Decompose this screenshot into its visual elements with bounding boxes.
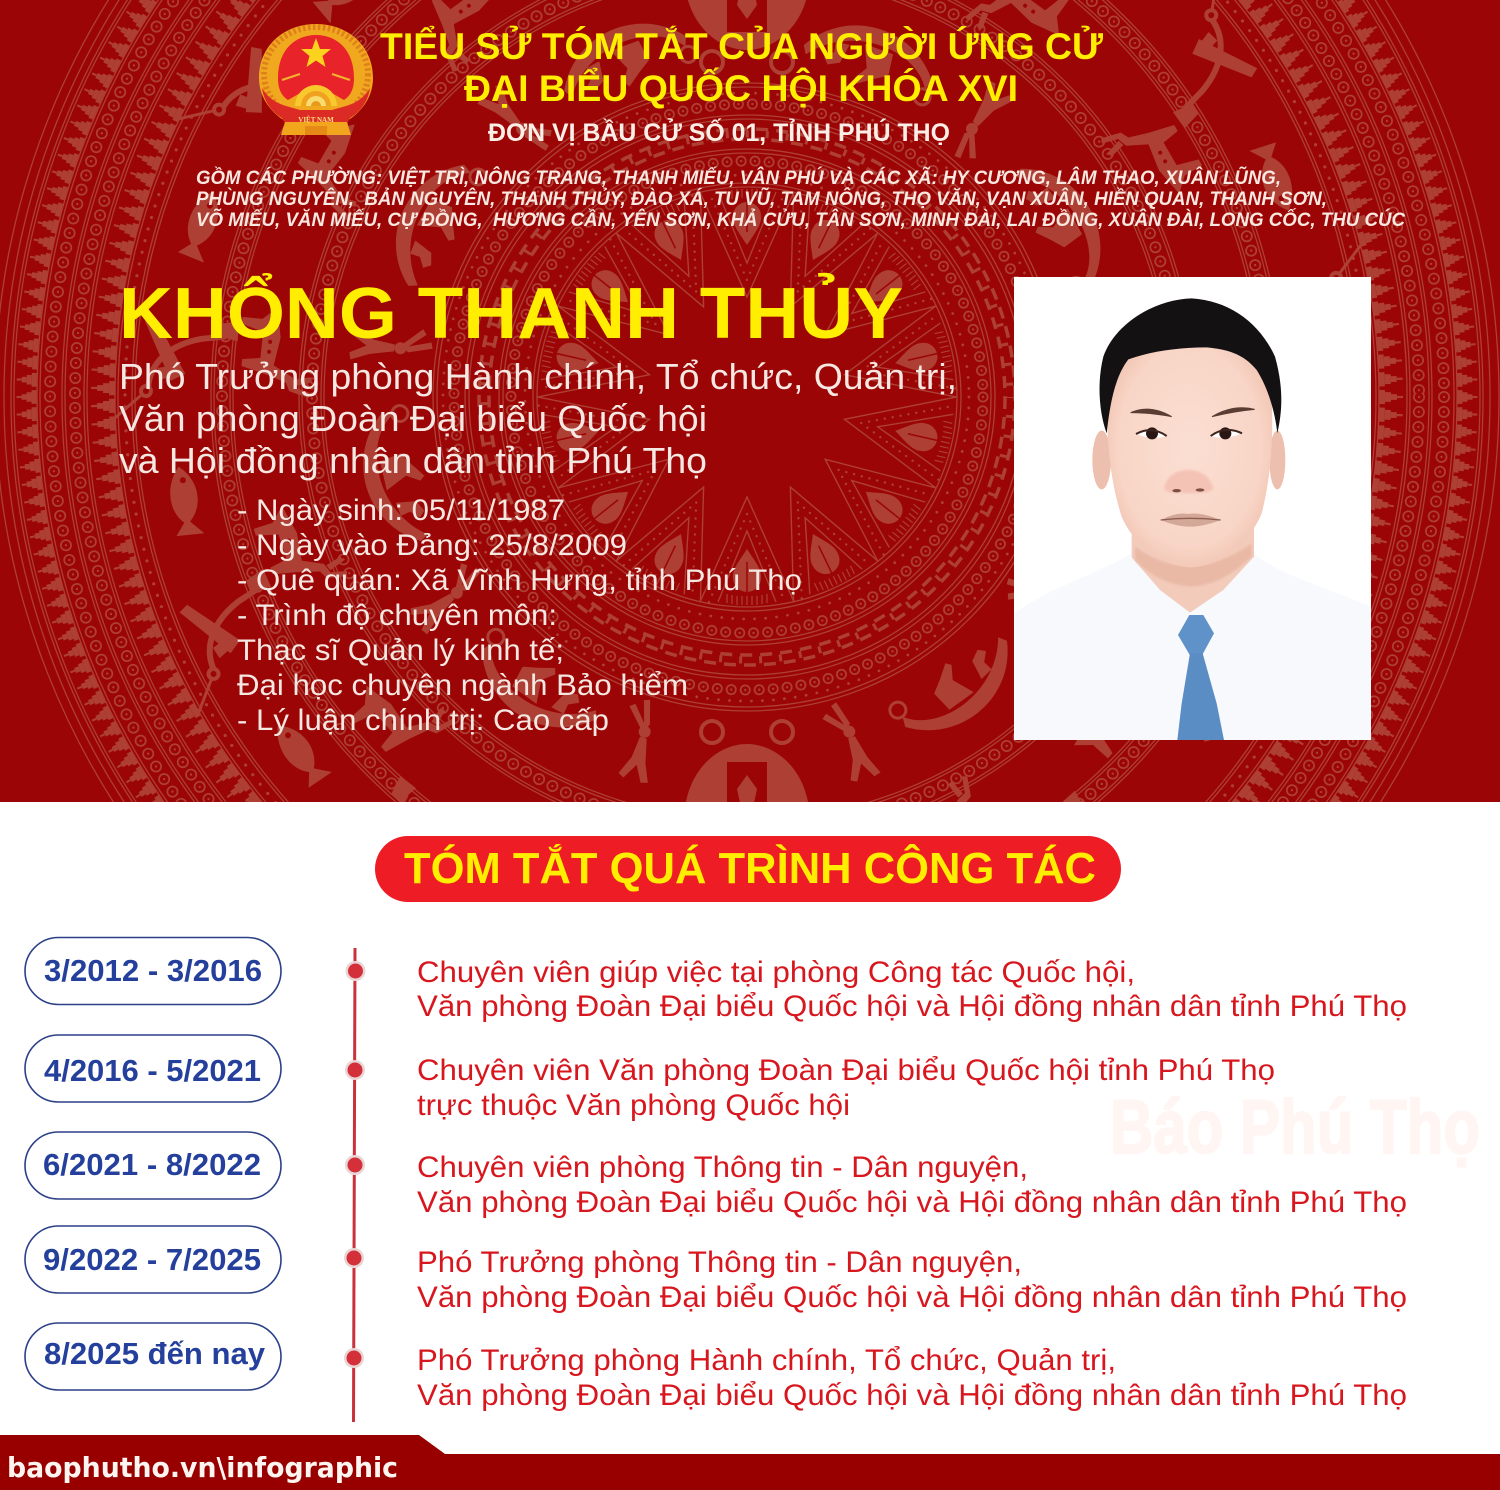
date pill: 9/2022 - 7/2025 <box>25 1226 281 1293</box>
date pill: 6/2021 - 8/2022 <box>25 1132 281 1199</box>
text block: personal details: - Trình độ chuyên môn: <box>237 599 557 632</box>
text block: personal details: - Ngày vào Đảng: 25/8/2009 <box>237 529 627 562</box>
date pill: 4/2016 - 5/2021: 4/2016 - 5/2021 <box>44 1053 261 1088</box>
heading pill: career summary: TÓM TẮT QUÁ TRÌNH CÔNG TÁC <box>404 842 1096 893</box>
heading pill: career summary <box>375 836 1121 902</box>
text block: wards and communes: VÕ MIẾU, VĂN MIẾU, CỰ ĐỒNG, HƯƠNG CẦN, YÊN SƠN, KHẢ CỬU, TÂN SƠN, MINH ĐÀI, LAI ĐỒNG, XUÂN ĐÀI, LONG CỐC, THU CÚC <box>196 207 1406 231</box>
portrait photo <box>1014 277 1371 740</box>
footer bar <box>0 1435 1500 1490</box>
career entry 4: Văn phòng Đoàn Đại biểu Quốc hội và Hội đồng nhân dân tỉnh Phú Thọ <box>417 1281 1407 1314</box>
title: ĐẠI BIỂU QUỐC HỘI KHÓA XVI <box>464 67 1018 109</box>
career entry 2: Chuyên viên Văn phòng Đoàn Đại biểu Quốc hội tỉnh Phú Thọ <box>417 1054 1275 1087</box>
date pill: 3/2012 - 3/2016 <box>25 938 281 1004</box>
career entry 2 <box>417 1054 1275 1122</box>
date pill: 6/2021 - 8/2022: 6/2021 - 8/2022 <box>43 1147 261 1182</box>
panel: career summary background <box>0 802 1500 1490</box>
text block: personal details <box>237 494 802 737</box>
timeline axis with markers <box>344 948 366 1422</box>
career entry 5: Phó Trưởng phòng Hành chính, Tổ chức, Quản trị, <box>417 1344 1116 1377</box>
text block: current position: và Hội đồng nhân dân tỉnh Phú Thọ <box>119 440 707 481</box>
date pill: 3/2012 - 3/2016: 3/2012 - 3/2016 <box>44 953 262 988</box>
career entry 3: Chuyên viên phòng Thông tin - Dân nguyện, <box>417 1151 1028 1184</box>
text block: current position <box>119 356 957 481</box>
footer bar: baophutho.vn\infographic <box>7 1451 398 1484</box>
icon: Vietnam national emblem <box>259 24 373 135</box>
career entry 1 <box>417 956 1407 1023</box>
text block: personal details: Thạc sĩ Quản lý kinh tế; <box>237 634 564 667</box>
career entry 5: Văn phòng Đoàn Đại biểu Quốc hội và Hội đồng nhân dân tỉnh Phú Thọ <box>417 1379 1407 1412</box>
text block: current position: Văn phòng Đoàn Đại biểu Quốc hội <box>119 398 707 439</box>
career entry 4: Phó Trưởng phòng Thông tin - Dân nguyện, <box>417 1246 1022 1279</box>
career entry 2: trực thuộc Văn phòng Quốc hội <box>417 1089 850 1122</box>
date pill: 4/2016 - 5/2021 <box>25 1035 281 1102</box>
text block: personal details: - Ngày sinh: 05/11/1987 <box>237 494 565 527</box>
career entry 5 <box>417 1344 1407 1412</box>
candidate name: KHỔNG THANH THỦY <box>119 273 903 354</box>
subtitle: electoral unit: ĐƠN VỊ BẦU CỬ SỐ 01, TỈNH PHÚ THỌ <box>488 117 950 147</box>
text block: wards and communes: GỒM CÁC PHƯỜNG: VIỆT TRÌ, NÔNG TRANG, THANH MIẾU, VÂN PHÚ VÀ CÁC XÃ: HY CƯƠNG, LÂM THAO, XUÂN LŨNG, <box>196 165 1281 189</box>
text block: wards and communes: PHÙNG NGUYÊN, BẢN NGUYÊN, THANH THỦY, ĐÀO XÁ, TU VŨ, TAM NÔNG, THỌ VĂN, VẠN XUÂN, HIỀN QUAN, THANH SƠN, <box>196 186 1327 210</box>
career entry 1: Chuyên viên giúp việc tại phòng Công tác Quốc hội, <box>417 956 1135 989</box>
text block: personal details: - Quê quán: Xã Vĩnh Hưng, tỉnh Phú Thọ <box>237 564 802 597</box>
date pill: 8/2025 to present: 8/2025 đến nay <box>44 1336 266 1371</box>
text block: personal details: Đại học chuyên ngành Bảo hiểm <box>237 669 688 702</box>
title: TIỂU SỬ TÓM TẮT CỦA NGƯỜI ỨNG CỬ <box>380 25 1103 67</box>
career entry 3 <box>417 1151 1407 1219</box>
career entry 4 <box>417 1246 1407 1314</box>
icon: Vietnam national emblem: VIỆT NAM <box>298 116 334 124</box>
text block: wards and communes <box>196 165 1406 231</box>
career entry 1: Văn phòng Đoàn Đại biểu Quốc hội và Hội đồng nhân dân tỉnh Phú Thọ <box>417 990 1407 1023</box>
career entry 3: Văn phòng Đoàn Đại biểu Quốc hội và Hội đồng nhân dân tỉnh Phú Thọ <box>417 1186 1407 1219</box>
panel: red header background with bronze drum pattern <box>0 0 1500 802</box>
date pill: 8/2025 to present <box>25 1323 281 1390</box>
date pill: 9/2022 - 7/2025: 9/2022 - 7/2025 <box>43 1242 261 1277</box>
text block: current position: Phó Trưởng phòng Hành chính, Tổ chức, Quản trị, <box>119 356 957 397</box>
title <box>380 25 1103 109</box>
text block: personal details: - Lý luận chính trị: Cao cấp <box>237 704 609 737</box>
